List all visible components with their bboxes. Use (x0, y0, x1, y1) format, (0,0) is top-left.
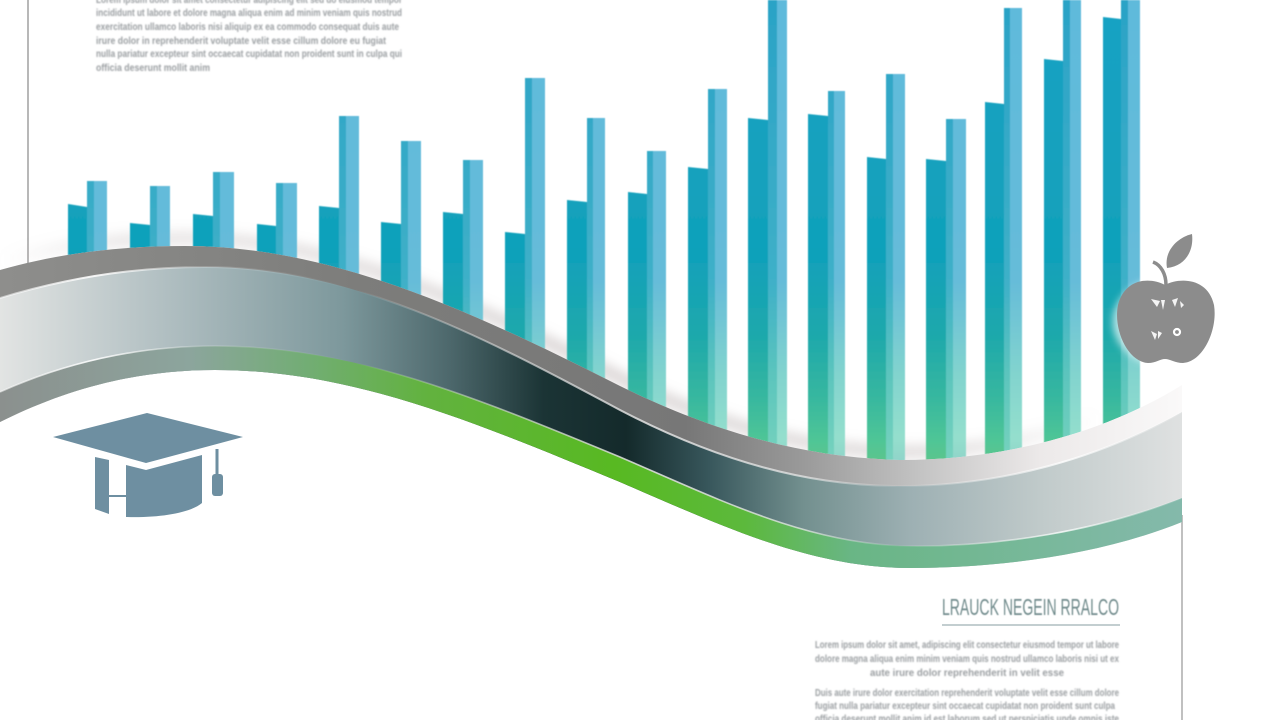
icon: graduation cap (53, 413, 243, 517)
bottom right paragraph one: aute irure dolor reprehenderit in velit esse (870, 667, 1064, 679)
bottom right paragraph two: fugiat nulla pariatur excepteur sint occaecat cupidatat non proident sunt culpa (815, 700, 1115, 712)
bar pair 4 (257, 183, 297, 470)
bar pair 17 (1044, 0, 1081, 470)
top paragraph: exercitation ullamco laboris nisi aliquip ex ea commodo consequat duis aute (96, 21, 399, 33)
bar pair 16 (985, 8, 1022, 470)
left border line (27, 0, 29, 265)
top paragraph: officia deserunt mollit anim (96, 62, 210, 74)
bar pair 18 (1103, 0, 1140, 470)
top paragraph (96, 0, 402, 74)
bar pair 12 (748, 0, 787, 470)
top paragraph: nulla pariatur excepteur sint occaecat cupidatat non proident sunt in culpa qui (96, 48, 402, 60)
bottom right paragraph one (815, 639, 1119, 679)
ribbon lower highlight (0, 346, 1182, 546)
bar pair 14 (867, 74, 905, 470)
ribbon shadow (0, 238, 1182, 452)
ribbon green lower band (0, 346, 1182, 568)
right border line (1181, 515, 1183, 720)
bar pair 6 (381, 141, 421, 470)
bottom right paragraph one: Lorem ipsum dolor sit amet, adipiscing elit consectetur eiusmod tempor ut labore (815, 639, 1119, 651)
bar pair 10 (628, 151, 666, 470)
bar pair 11 (688, 89, 727, 470)
bottom right heading: LRAUCK NEGEIN RRALCO (942, 594, 1119, 620)
top paragraph: incididunt ut labore et dolore magna aliqua enim ad minim veniam quis nostrud (96, 7, 402, 19)
bottom right paragraph one: dolore magna aliqua enim minim veniam quis nostrud ullamco laboris nisi ut ex (815, 653, 1119, 665)
bottom right paragraph two (815, 687, 1119, 720)
bar pair 2 (129, 185, 171, 248)
bar pair 1 (67, 180, 108, 255)
ribbon top band (0, 246, 1182, 568)
wave ribbon (0, 246, 1182, 568)
bar pair 15 (926, 119, 966, 470)
bar pair 3 (192, 171, 235, 248)
ribbon upper highlight (0, 267, 1182, 486)
top paragraph: irure dolor in reprehenderit voluptate velit esse cillum dolore eu fugiat (96, 35, 386, 47)
icon: apple (1117, 234, 1215, 363)
bar pair 13 (808, 91, 845, 470)
bottom right paragraph two: Duis aute irure dolor exercitation reprehenderit voluptate velit esse cillum dolore (815, 687, 1119, 699)
bar pair 5 (319, 116, 359, 470)
heading rule (942, 624, 1120, 626)
bar pair 7 (443, 160, 483, 470)
ribbon middle gradient band (0, 267, 1182, 568)
apple glow (1113, 278, 1217, 366)
bar chart (68, 0, 1140, 470)
bar pair 9 (567, 118, 605, 470)
bar pair 8 (505, 78, 545, 470)
